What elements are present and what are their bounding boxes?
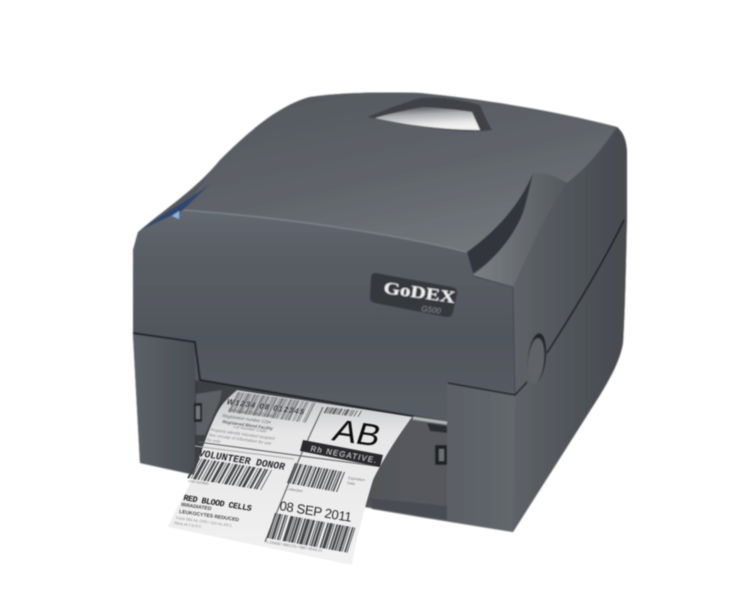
model text: G500 [421, 304, 442, 316]
expiry barcode [291, 473, 341, 482]
top barcode [233, 402, 313, 413]
product small print: Store at 1 to 6 C [174, 521, 202, 529]
product name: RED BLOOD CELLS [182, 493, 253, 514]
top left small print: Registered Blood Facility [222, 419, 274, 431]
body silhouette [133, 92, 627, 532]
printed label [168, 390, 412, 565]
cover step shadow [467, 173, 533, 273]
small captions: Expiration [348, 476, 365, 482]
donor title: VOLUNTEER DONOR [197, 448, 286, 473]
left front block [133, 335, 195, 475]
label sheet [168, 390, 412, 565]
recess under cover [195, 380, 447, 507]
top left small print [206, 407, 277, 446]
collection date: 08 SEP 2011 [279, 498, 353, 525]
top left small print: See circular of information for use [208, 432, 273, 446]
top left small print: Hemacare Blood Center [228, 407, 275, 418]
top left small print: Properly identify intended recipient [210, 427, 277, 441]
left media guide [194, 390, 222, 435]
side latch button [525, 332, 549, 385]
printer body [133, 92, 627, 532]
blood type: AB [329, 413, 386, 453]
blue status strip [142, 182, 212, 229]
top cover surface [183, 92, 617, 252]
blood type bar: Rh NEGATIVE. [309, 444, 378, 465]
right media guide [400, 420, 447, 505]
lower right front block [372, 383, 515, 532]
small captions: Unit number [188, 479, 210, 486]
handle recess [367, 97, 492, 131]
small captions [188, 476, 365, 553]
label dividers [195, 407, 383, 542]
product details [179, 502, 240, 523]
serial number text: W1234 08 012345 [225, 397, 307, 416]
top left small print: Lot Number Code [233, 424, 268, 434]
front face [133, 210, 515, 422]
cover step highlight strip [473, 173, 567, 287]
top left small print: Registration number 1234 [222, 413, 272, 425]
black seam lines [133, 220, 624, 422]
top left small print: Rx only [206, 437, 222, 444]
product details: IRRADIATED [181, 502, 212, 512]
small top right barcode [325, 410, 361, 414]
right side panel [513, 127, 627, 532]
blood type bar [300, 440, 383, 467]
logo text: GoDEX [382, 278, 457, 307]
small captions: Collection [286, 487, 303, 493]
slot highlight [413, 418, 447, 423]
small captions: Date [347, 481, 355, 486]
bottom barcode [271, 526, 353, 540]
logo plate [370, 273, 457, 317]
seam highlight [183, 210, 467, 252]
product small print: From 500 mL CPD / 110 mL AS-1 [176, 516, 232, 528]
product details: LEUKOCYTES REDUCED [179, 509, 240, 523]
small captions: 1-234567-890123 / 0987-6543-21 [266, 540, 323, 553]
donor barcode [192, 468, 266, 480]
